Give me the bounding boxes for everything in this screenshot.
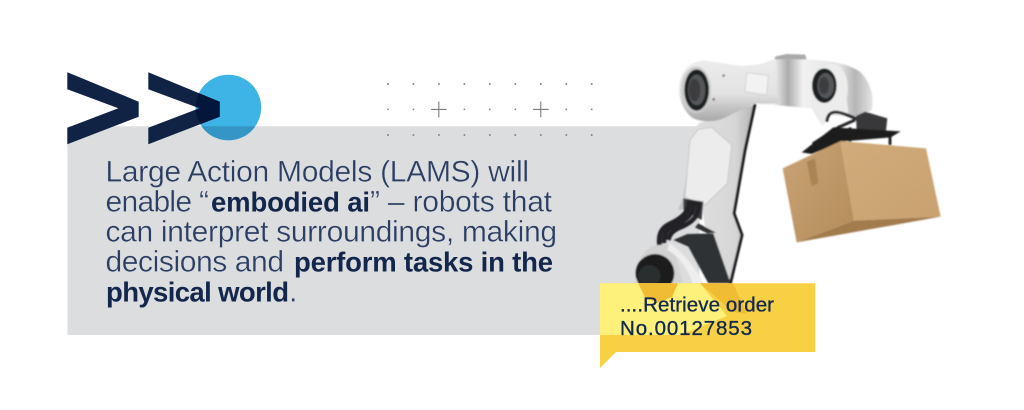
body text: . [289,276,297,309]
callout text: ....Retrieve order [620,294,774,317]
callout lighter overlap over panel [600,283,727,335]
robot upper arm [679,54,873,121]
body text: can interpret surroundings, making [106,216,557,249]
body text [106,156,557,309]
body text: perform tasks in the [294,247,553,278]
gripper [802,112,901,154]
robot forearm [678,104,755,285]
cardboard box [783,141,941,242]
robot arm holding a cardboard box [635,54,941,293]
callout text [620,294,774,340]
callout amber robot overlap [638,283,747,314]
icon: blue circle [196,74,262,140]
robot wrist [811,64,848,126]
body text: physical world [106,277,289,308]
body text: enable “ [106,186,209,219]
robot motor and cables [635,198,731,293]
dot grid with plus marks [387,83,593,136]
grey text panel [68,126,700,335]
icon: double chevron arrows [67,72,220,144]
body text: decisions and [106,246,284,279]
body text: Large Action Models (LAMS) will [106,156,529,189]
body text: ” – robots that [370,186,553,219]
callout text: No.00127853 [620,317,752,340]
yellow speech callout [600,283,815,368]
body text: embodied ai [211,187,370,218]
